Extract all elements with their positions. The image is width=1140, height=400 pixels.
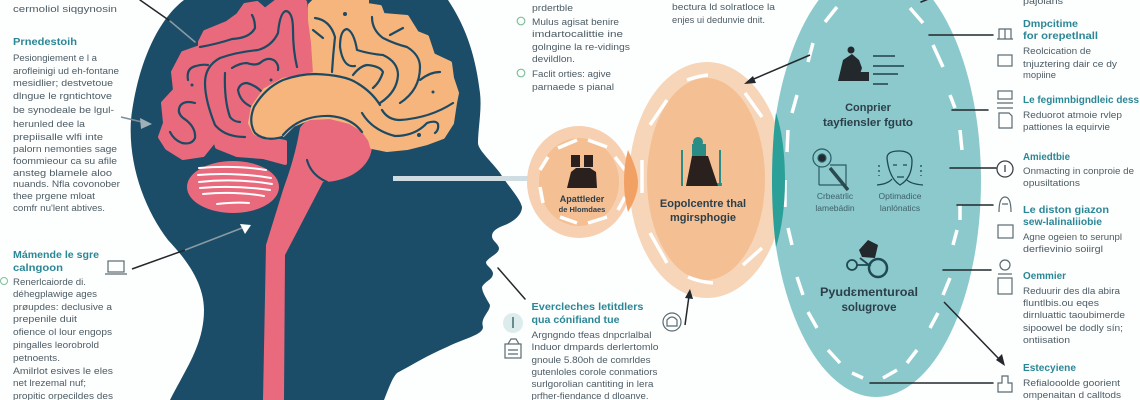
panel: medium peach oval xyxy=(629,62,785,298)
teal label: Pyudementuroal xyxy=(820,287,918,314)
left text block: Mámende le sgre: Mámende le sgre xyxy=(13,249,99,261)
middle top text block: devildlon. xyxy=(532,54,575,64)
right item: Le diston giazon: Agne ogeien to serunpl xyxy=(1023,232,1122,242)
left text block: Prnedestoih: ansteg blamele aloo xyxy=(13,168,112,178)
left text block: Mámende le sgre: Renerlcaiorde di. xyxy=(13,277,86,287)
right item: Le fegimnbigndleic: pattiones la equirvie xyxy=(1023,122,1110,132)
icon: person and window xyxy=(998,197,1013,238)
right item: Oemmier: Oemmier xyxy=(1023,270,1066,282)
arrow: laptop to stem xyxy=(132,224,251,269)
right item: Estecyiene: Estecyiene xyxy=(1023,362,1076,374)
teal sublabel: Optimadice xyxy=(878,191,922,213)
left text block: Prnedestoih: dlngue le rgntichtove xyxy=(13,91,112,101)
right item: Le diston giazon: derfievinio soiirgl xyxy=(1023,244,1103,254)
left text block: Prnedestoih: be synodeale be lgul- xyxy=(13,105,114,115)
leader lines xyxy=(870,35,996,383)
top centre text block: enjes ui dedunvie dnit. xyxy=(672,15,765,25)
panel: small peach circle xyxy=(527,126,631,238)
left text block: Mámende le sgre: prøupdes: declusive a xyxy=(13,302,112,312)
arrow: icon to medium oval xyxy=(685,289,693,325)
middle top text block xyxy=(532,3,631,92)
right item: Le fegimnbigndleic: Reduorot atmoie rvlep xyxy=(1023,110,1122,120)
middle top text block: prdertble xyxy=(532,3,573,13)
arrow: text to cerebrum xyxy=(121,117,152,129)
icon: briefcase xyxy=(505,339,521,358)
right item: Oemmier: dirnluattic taoubimerde xyxy=(1023,310,1125,320)
top centre text block: bectura ld solratloce la xyxy=(672,2,775,12)
teal label: Conprier xyxy=(823,102,913,129)
teal label: Conprier: Conprier xyxy=(845,102,892,114)
right item: Oemmier: sipoowel be dodly sín; xyxy=(1023,323,1123,333)
left text block: Prnedestoih: Pesiongiement e l a xyxy=(13,53,97,63)
bottom middle text block: Argngndo tfeas dnpcrlalbal xyxy=(532,330,652,340)
left text block: Mámende le sgre: Amilrlot esives le eles xyxy=(13,366,114,376)
nose connector bar xyxy=(393,176,528,181)
right item: Dmpcitime: Reolcication de xyxy=(1023,46,1091,56)
brain illustration xyxy=(160,0,457,400)
left text block: Mámende le sgre: net lrezemal nuf; xyxy=(13,378,86,388)
bullet icon: middle one xyxy=(517,17,525,25)
teal sublabel: Crbeatrlic xyxy=(815,191,855,213)
left text block: top fragment: cermoliol siqgynosin xyxy=(13,4,117,14)
panel: teal oval xyxy=(771,0,981,397)
right item: Amiedtbie: Onmacting in conproie de xyxy=(1023,166,1134,176)
overlap: peach and teal xyxy=(772,113,785,247)
left text block: Prnedestoih: mesidlier; destvetoue xyxy=(13,78,113,88)
teal label: Pyudementuroal: Pyudɛmenturoal xyxy=(820,287,918,299)
medium oval label: Eopolcentre thal xyxy=(660,198,746,210)
bottom middle text block: qua cónifiand tue xyxy=(532,314,620,326)
icon: wheel and bag xyxy=(847,240,887,277)
right item: Oemmier: Reduurir des dla abira xyxy=(1023,286,1120,296)
small circle label: Apattleder xyxy=(560,194,605,204)
cerebellum xyxy=(187,161,279,213)
right item: Dmpcitime: tnjuztering dair ce dy xyxy=(1023,59,1118,69)
icon: book and calendar xyxy=(997,29,1013,66)
pink midbrain and stem xyxy=(263,116,372,400)
right item: Oemmier: ontiisation xyxy=(1023,335,1070,345)
left text block: Mámende le sgre: déhegplawige ages xyxy=(13,289,98,299)
left text block: Mámende le sgre: petnoents. xyxy=(13,353,60,363)
left text block: Prnedestoih xyxy=(13,36,120,213)
middle top text block: Faclit orties: agive xyxy=(532,69,611,79)
bottom middle text block: surlgorolian cantiting in lera xyxy=(532,379,654,389)
bottom middle text block: gnoule 5.80oh de comrldes xyxy=(532,355,651,365)
teal label: Conprier: tayfiensler fguto xyxy=(823,117,913,129)
line: mouth to text xyxy=(498,268,525,299)
left text block: Mámende le sgre: ofience ol lour engops xyxy=(13,327,113,337)
orange cerebrum xyxy=(250,0,457,150)
right item: Estecyiene: Refialooolde goorient xyxy=(1023,378,1121,388)
icon: two figures xyxy=(567,155,597,188)
left text block: Prnedestoih: herunled dee la xyxy=(13,119,85,129)
head silhouette xyxy=(131,0,522,400)
left text block: Prnedestoih: thee prgene mloat xyxy=(13,191,96,201)
line: top of teal oval xyxy=(921,0,931,2)
left text block: Prnedestoih: nuands. Nfla covonober xyxy=(13,179,120,189)
bullet icon: middle two xyxy=(517,69,525,77)
right item: Amiedtbie: opusiltations xyxy=(1023,178,1081,188)
icon: bulb and device xyxy=(998,260,1012,294)
small circle label: de Hlomdaes xyxy=(559,205,605,214)
icon: info circle xyxy=(997,161,1013,177)
right item: Amiedtbie xyxy=(1023,151,1134,188)
right item: Le diston giazon: Le diston giazon xyxy=(1023,204,1109,216)
teal sublabel: Crbeatrlic: Crbeatrlic xyxy=(817,191,854,201)
right item: Estecyiene: ompenaitan d calltods xyxy=(1023,390,1122,400)
icon: laptop xyxy=(105,261,127,274)
left text block: Mámende le sgre: calngoon xyxy=(13,262,63,274)
left text block: Prnedestoih: prepiisalle wlfi inte xyxy=(13,132,103,142)
pink cerebrum folds xyxy=(170,11,297,143)
teal sublabel: Crbeatrlic: lamebádin xyxy=(815,203,855,213)
bottom middle text block: Evercleches letitdlers xyxy=(532,301,644,313)
left text block: Prnedestoih: arofleinigi ud eh-fontane xyxy=(13,66,119,76)
top centre text block xyxy=(672,2,775,25)
right item: Dmpcitime: for orepetlnall xyxy=(1023,30,1098,42)
bottom middle text block xyxy=(532,301,658,400)
left text block: Mámende le sgre xyxy=(13,249,114,400)
left text block: Mámende le sgre: pingalles leorobrold xyxy=(13,340,99,350)
right item: Oemmier: fluntlbis.ou eqes xyxy=(1023,298,1100,308)
left text block: Prnedestoih: palorn nemonties sage xyxy=(13,144,117,154)
icon: face xyxy=(877,151,923,185)
teal label: Pyudementuroal: solugrove xyxy=(842,302,896,314)
arrow: top left to brain xyxy=(140,0,195,42)
icon: person with text lines xyxy=(838,46,904,84)
bottom middle text block: Induor dmpards derlertomlo xyxy=(532,342,658,352)
middle top text block: Mulus agisat benire xyxy=(532,17,619,27)
brain dots xyxy=(190,12,434,137)
right item: Dmpcitime: Dmpcitime xyxy=(1023,18,1078,30)
right item: Amiedtbie: Amiedtbie xyxy=(1023,151,1070,163)
overlap: small and medium peach xyxy=(624,150,638,212)
right item: Estecyiene xyxy=(1023,362,1122,400)
right item: Oemmier xyxy=(1023,270,1125,345)
icon: flask tower xyxy=(682,137,722,186)
medium oval label xyxy=(660,198,746,224)
middle top text block: golngine la re-vidings xyxy=(532,42,631,52)
pink cerebrum xyxy=(160,0,313,163)
medium oval label: mgirsphogie xyxy=(670,212,736,224)
middle top text block: imdartocalittie ine xyxy=(532,29,623,39)
icon: head badge xyxy=(503,313,523,333)
small circle label xyxy=(559,194,605,214)
icon: hand and target xyxy=(813,149,848,190)
right item: Dmpcitime xyxy=(1023,18,1118,80)
bottom middle text block: gutenloles corole conmatiors xyxy=(532,367,658,377)
right item: Le diston giazon xyxy=(1023,204,1122,254)
arrow: teal to Estecyiene xyxy=(944,302,1005,366)
orange crescent outline xyxy=(251,74,380,139)
right item: Dmpcitime: mopiine xyxy=(1023,70,1056,80)
teal sublabel: Optimadice: Optimadice xyxy=(878,191,922,201)
right item: Le diston giazon: sew-lalinaliiobie xyxy=(1023,216,1102,228)
icon: monitor and note xyxy=(997,91,1013,128)
icon: circled face xyxy=(663,313,681,331)
teal sublabel: Optimadice: lanlónatics xyxy=(880,203,920,213)
middle top text block: parnaede s pianal xyxy=(532,82,614,92)
arrow: teal to medium oval xyxy=(744,55,810,84)
left text block: Prnedestoih: foommieour ca su afile xyxy=(13,156,117,166)
bullet icon: left xyxy=(0,278,8,284)
left text block: Mámende le sgre: prepenile duit xyxy=(13,314,78,324)
icon: tower xyxy=(998,376,1012,392)
right item: Le fegimnbigndleic xyxy=(1023,94,1139,132)
left text block: Prnedestoih: Prnedestoih xyxy=(13,36,77,48)
orange cerebrum folds xyxy=(313,17,453,136)
left text block: Prnedestoih: comfr nu'lent abtives. xyxy=(13,203,105,213)
